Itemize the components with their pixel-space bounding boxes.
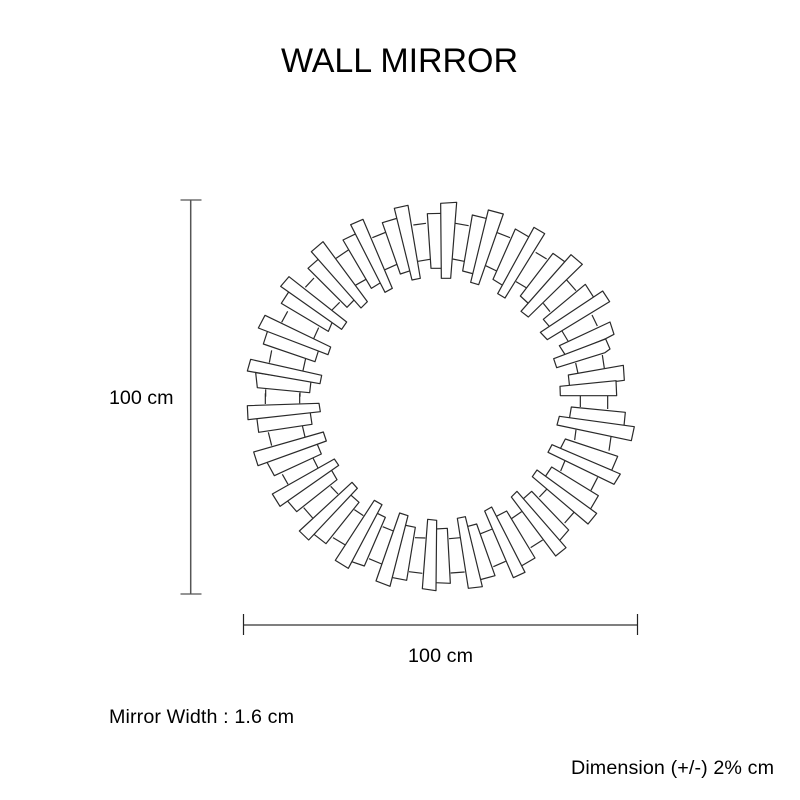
dimension tolerance note: Dimension (+/-) 2% cm: [571, 757, 774, 779]
title: WALL MIRROR: [281, 42, 518, 80]
mirror width note: Mirror Width : 1.6 cm: [109, 706, 294, 728]
width label: 100 cm: [408, 645, 473, 667]
top-right quadrant of slats: [441, 202, 624, 396]
height dimension arrow: [180, 200, 202, 594]
top-left quadrant of slats: [247, 205, 444, 397]
bottom-right quadrant of slats: [435, 396, 634, 588]
height label: 100 cm: [109, 387, 174, 409]
width dimension arrow: [244, 614, 638, 635]
sunburst wall mirror drawing: [247, 202, 634, 591]
bottom-left quadrant of slats: [247, 393, 437, 591]
